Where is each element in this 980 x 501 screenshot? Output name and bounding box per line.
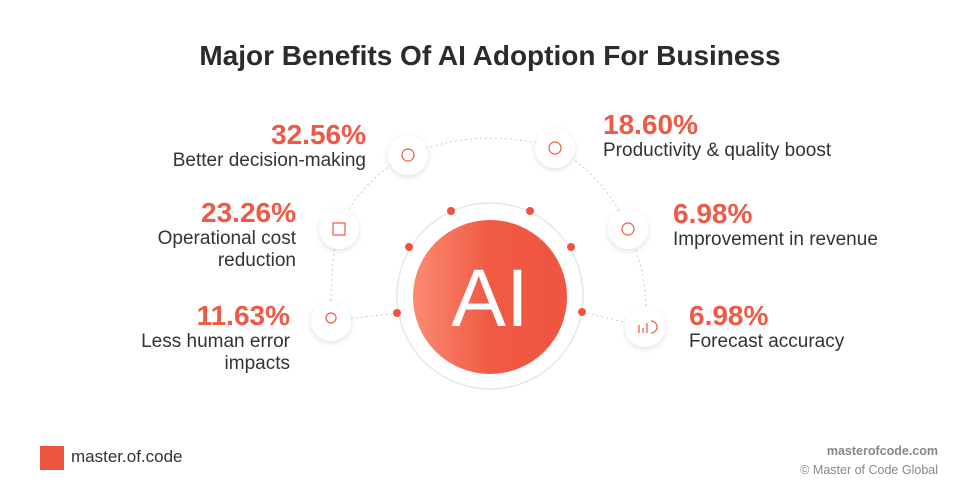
footer credits: masterofcode.com [827, 444, 938, 458]
text: revenue [673, 198, 878, 250]
footer credits: © Master of Code Global [800, 463, 938, 477]
logo [40, 446, 183, 470]
text: forecast: 6.98% [689, 300, 768, 331]
text: less human error: 11.63% [197, 300, 290, 331]
footer credits [800, 444, 938, 477]
text: better decision-making [173, 119, 366, 171]
text: productivity [603, 109, 831, 161]
text: productivity: 18.60% [603, 109, 698, 140]
text: productivity: Productivity & quality boost [603, 140, 831, 161]
AI circle: AI [451, 253, 529, 344]
text: operational cost: 23.26% [201, 197, 296, 228]
text: revenue: 6.98% [673, 198, 752, 229]
text: better decision-making: Better decision-making [173, 150, 366, 171]
title: Major Benefits Of AI Adoption For Business [199, 40, 781, 71]
text: forecast [689, 300, 844, 352]
text: better decision-making: 32.56% [271, 119, 366, 150]
text: less human error: Less human error [141, 331, 290, 352]
text: operational cost: reduction [218, 250, 296, 271]
logo: master.of.code [71, 447, 183, 466]
text: less human error: impacts [225, 353, 290, 374]
text: forecast: Forecast accuracy [689, 331, 844, 352]
text: less human error [141, 300, 290, 374]
text: operational cost [158, 197, 296, 271]
AI circle [413, 220, 567, 374]
text: operational cost: Operational cost [158, 228, 296, 249]
text: revenue: Improvement in revenue [673, 229, 878, 250]
icons [311, 128, 665, 347]
